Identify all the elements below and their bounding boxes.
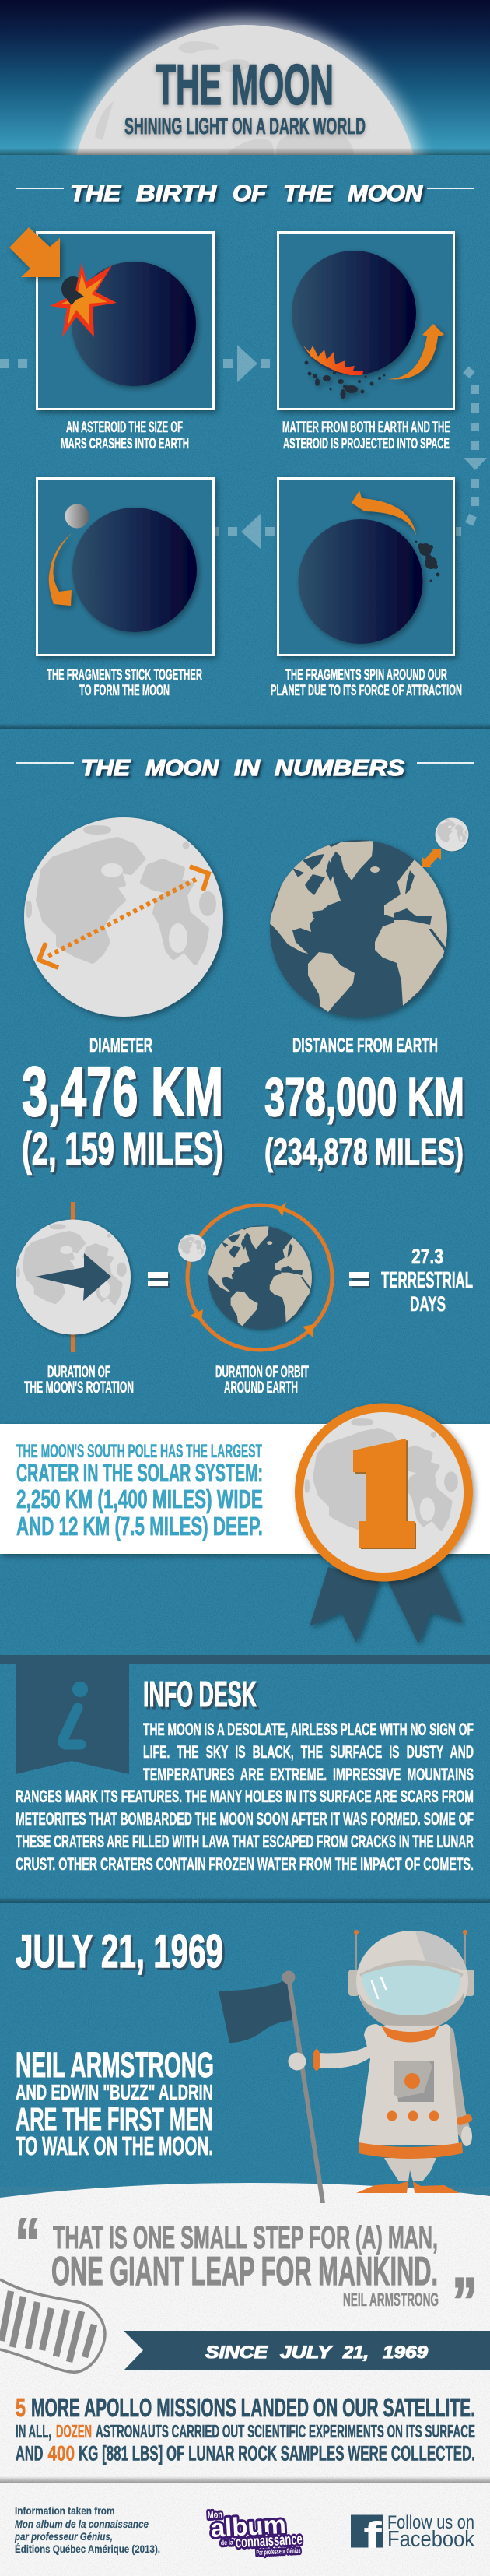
panel: fragments stick [37, 478, 213, 655]
panel: matter projected [278, 232, 454, 409]
caption 3 [47, 667, 202, 699]
planet [299, 519, 423, 644]
section heading: the moon in numbers: THE [81, 756, 131, 781]
section heading: the birth of the moon: THE [70, 181, 122, 206]
small moon [65, 504, 89, 528]
planet [72, 262, 196, 386]
orange arrow [9, 227, 60, 277]
first men text: ARE THE FIRST MEN [16, 2101, 213, 2137]
first men text [16, 2045, 214, 2160]
facebook follow [351, 2512, 474, 2555]
stat: diameter [22, 1035, 223, 1175]
rotation caption [24, 1363, 134, 1397]
curved arrow [387, 324, 444, 379]
since banner [124, 2331, 490, 2370]
panel: fragments spin [278, 478, 454, 655]
source credit: Mon album de la connaissance [15, 2518, 149, 2530]
astronaut [288, 1923, 474, 2193]
caption 2 [282, 420, 450, 452]
rotation arrow [35, 1253, 111, 1301]
collar [381, 2026, 439, 2043]
body [359, 2024, 459, 2145]
rotation caption: THE MOON'S ROTATION [24, 1379, 134, 1397]
section heading: the birth of the moon: BIRTH [136, 181, 217, 206]
equals sign [148, 1272, 168, 1286]
planet [72, 508, 197, 632]
facebook follow: f [364, 2514, 382, 2555]
logo: de la [221, 2538, 234, 2546]
source credit [14, 2504, 160, 2555]
distance arrow [422, 849, 441, 867]
first men text: NEIL ARMSTRONG [16, 2045, 214, 2085]
legs [384, 2158, 436, 2181]
stat: distance [264, 1035, 464, 1173]
planet [292, 251, 416, 375]
crater text: AND 12 KM (7.5 MILES) DEEP. [16, 1512, 263, 1541]
crater text [16, 1441, 263, 1541]
crater text: 2,250 KM (1,400 MILES) WIDE [16, 1485, 263, 1513]
caption 1 [61, 420, 189, 452]
section heading: the birth of the moon: OF [233, 181, 267, 206]
caption 3: THE FRAGMENTS STICK TOGETHER [47, 667, 202, 684]
facebook follow: Follow us on [387, 2512, 474, 2533]
quote [15, 2204, 478, 2340]
left arm [319, 2041, 375, 2068]
moon rotation [16, 1202, 131, 1352]
logo: album [210, 2510, 287, 2543]
caption 1: MARS CRASHES INTO EARTH [61, 436, 189, 452]
moon glow [65, 19, 425, 379]
caption 4 [271, 667, 462, 699]
source credit: Éditions Québec Amérique (2013). [15, 2543, 160, 2555]
shadow under header edge [0, 148, 490, 155]
flag [219, 1971, 325, 2203]
crater text: CRATER IN THE SOLAR SYSTEM: [16, 1459, 263, 1487]
first men text: AND EDWIN "BUZZ" ALDRIN [16, 2080, 213, 2104]
debris [415, 540, 440, 582]
orbit caption [215, 1363, 309, 1397]
flow path arrows between panels [0, 345, 487, 550]
terrestrial days: DAYS [410, 1292, 446, 1316]
close quotes: ” [452, 2263, 478, 2340]
fire [303, 345, 363, 375]
since banner: 21, [342, 2342, 369, 2362]
terrestrial days [381, 1245, 473, 1316]
info heading: INFO DESK [143, 1674, 257, 1714]
header moon [71, 25, 419, 374]
caption 1: AN ASTEROID THE SIZE OF [66, 420, 183, 436]
equals sign [349, 1272, 369, 1286]
crater text: THE MOON'S SOUTH POLE HAS THE LARGEST [16, 1441, 262, 1462]
since banner: JULY [280, 2342, 334, 2362]
logo: connaissance [235, 2531, 303, 2551]
facebook follow: Facebook [387, 2527, 474, 2552]
section heading: the moon in numbers: IN [234, 756, 261, 781]
number one [353, 1439, 415, 1548]
asteroid [61, 276, 85, 301]
footprint [0, 2279, 105, 2372]
right arm [443, 2027, 472, 2145]
antennae [354, 1930, 467, 1973]
logo [208, 2504, 303, 2559]
logo: Par professeur Génius [256, 2546, 301, 2557]
open quotes: “ [15, 2204, 40, 2281]
debris [305, 361, 386, 399]
apollo missions text: IN ALL, [16, 2421, 51, 2441]
main background [0, 155, 490, 2187]
section heading: the birth of the moon: THE [283, 181, 334, 206]
source credit: par professeur Génius, [14, 2530, 113, 2543]
title [124, 54, 366, 139]
logo: Mon [208, 2508, 222, 2521]
info banner [16, 1664, 129, 1774]
source credit: Information taken from [15, 2504, 115, 2517]
dashed diameter arrow [39, 866, 208, 968]
stat: diameter: (2, 159 MILES) [22, 1123, 223, 1175]
curved arrow [49, 533, 72, 606]
header background [0, 0, 490, 159]
medal [295, 1403, 473, 1644]
moon ground [0, 2183, 490, 2576]
title: THE MOON [156, 54, 334, 117]
stat: diameter: DIAMETER [89, 1035, 152, 1056]
section heading: the moon in numbers [16, 756, 474, 781]
date heading: JULY 21, 1969 [16, 1925, 223, 1977]
apollo missions text: DOZEN [56, 2421, 92, 2441]
ribbon [310, 1565, 463, 1644]
orbit caption: DURATION OF ORBIT [215, 1363, 309, 1381]
rotation caption: DURATION OF [47, 1363, 110, 1381]
hand [288, 2052, 306, 2071]
section heading: the birth of the moon: MOON [348, 181, 423, 206]
buttons [387, 2111, 439, 2121]
info body [16, 1720, 474, 1874]
terrestrial days: 27.3 [411, 1245, 443, 1268]
curved arrow [352, 490, 416, 536]
section heading: the moon in numbers: MOON [145, 756, 219, 781]
small moon [435, 817, 469, 852]
apollo missions text: 400 [48, 2441, 75, 2465]
section heading: the birth of the moon [16, 181, 474, 206]
panel: asteroid crash [9, 227, 213, 409]
earth with distant moon [261, 817, 469, 1017]
icon: info letter [63, 1682, 88, 1745]
info desk strip [0, 1655, 490, 1664]
chest box [394, 2061, 434, 2102]
earth orbit [178, 1202, 332, 1350]
section heading: the moon in numbers: NUMBERS [275, 756, 405, 781]
first men text: TO WALK ON THE MOON. [16, 2131, 213, 2160]
hem [359, 2142, 463, 2159]
orbit caption: AROUND EARTH [224, 1379, 298, 1397]
explosion [50, 262, 117, 337]
since banner: SINCE [205, 2342, 269, 2362]
helmet [356, 1931, 468, 2032]
caption 3: TO FORM THE MOON [79, 683, 170, 699]
stat: diameter: 3,476 KM [22, 1053, 223, 1131]
orbiting moon [178, 1234, 206, 1262]
visor [362, 1965, 460, 2015]
moon diameter illustration [24, 817, 223, 1017]
apollo missions text: 5 [16, 2393, 26, 2422]
white crater band [0, 1424, 490, 1554]
apollo missions text: AND [16, 2441, 44, 2465]
apollo missions text [16, 2393, 475, 2465]
ear pieces [348, 1970, 359, 1996]
boots [356, 2181, 460, 2193]
since banner: 1969 [383, 2342, 429, 2362]
